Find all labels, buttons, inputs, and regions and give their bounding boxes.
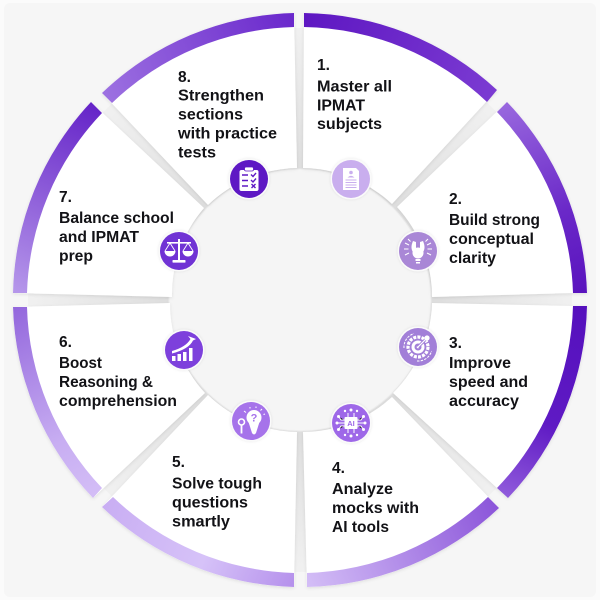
icon: balance scales	[158, 230, 200, 272]
text: step 5: questions	[172, 494, 248, 512]
text: step 1: Master all	[317, 78, 392, 96]
text: step 7: 7.	[59, 189, 72, 206]
text: step 4	[332, 460, 419, 536]
icon: AI chip	[330, 402, 372, 444]
panel: step 1	[303, 13, 497, 204]
text: step 7: and IPMAT	[59, 229, 140, 246]
ring segment 2	[497, 102, 587, 293]
ring segment 6	[13, 307, 102, 498]
text: step 5	[172, 454, 262, 530]
text: step 3: speed and	[449, 374, 528, 391]
ring segment 7	[13, 102, 102, 293]
text: step 8: tests	[178, 144, 216, 162]
icon: question bulb and key	[230, 400, 272, 442]
icon: growth chart	[164, 330, 204, 370]
panel: step 8	[102, 13, 297, 205]
text: step 4: AI tools	[332, 519, 389, 536]
text: step 8: 8.	[178, 69, 191, 86]
text: step 2: Build strong	[449, 212, 540, 229]
ring segment 4	[307, 497, 499, 587]
text: step 8: Strengthen	[178, 88, 264, 104]
icon: clipboard checklist	[228, 158, 270, 200]
text: step 1	[317, 57, 392, 133]
text: step 8: sections	[178, 106, 243, 124]
text: step 6: 6.	[59, 334, 72, 351]
text: step 2: 2.	[449, 191, 462, 208]
text: step 7: Balance school	[59, 210, 174, 227]
text: step 1: subjects	[317, 116, 382, 133]
text: step 1: 1.	[317, 57, 330, 74]
text: step 3: 3.	[449, 335, 462, 352]
panel: step 2	[397, 102, 587, 297]
centre hub	[169, 169, 431, 431]
text: step 6: Reasoning &	[59, 374, 153, 391]
text: step 5: 5.	[172, 454, 185, 471]
icon: AI chip: AI	[347, 419, 355, 428]
text: step 8	[177, 69, 277, 162]
text: step 3	[449, 335, 528, 410]
panel: step 4	[303, 397, 499, 587]
text: step 7	[59, 189, 174, 265]
text: step 6	[59, 334, 177, 410]
text: step 7: prep	[59, 248, 93, 265]
icon: light bulb	[398, 230, 438, 272]
icon: document	[330, 158, 372, 200]
panel: step 7	[13, 102, 204, 297]
text: step 3: Improve	[449, 355, 511, 372]
ring segment 5	[102, 497, 294, 587]
text: step 2: clarity	[449, 250, 496, 267]
text: step 5: smartly	[172, 514, 230, 530]
icon: target gear	[398, 326, 438, 368]
text: step 2	[449, 191, 540, 267]
text: step 8: with practice	[177, 126, 277, 142]
text: step 6: comprehension	[59, 393, 177, 410]
text: step 4: Analyze	[332, 481, 393, 498]
icon: question bulb and key: ?	[251, 412, 258, 424]
panel: step 5	[102, 395, 297, 587]
text: step 1: IPMAT	[317, 98, 366, 114]
text: step 5: Solve tough	[172, 476, 262, 492]
ring segment 8	[102, 13, 294, 103]
text: step 4: 4.	[332, 460, 345, 477]
text: step 6: Boost	[59, 355, 102, 372]
text: step 4: mocks with	[332, 500, 419, 517]
panel: step 3	[393, 303, 587, 498]
text: step 2: conceptual	[449, 231, 534, 248]
ring segment 3	[497, 306, 587, 498]
text: step 3: accuracy	[449, 393, 519, 410]
panel: step 6	[13, 303, 205, 498]
ring segment 1	[304, 13, 497, 102]
